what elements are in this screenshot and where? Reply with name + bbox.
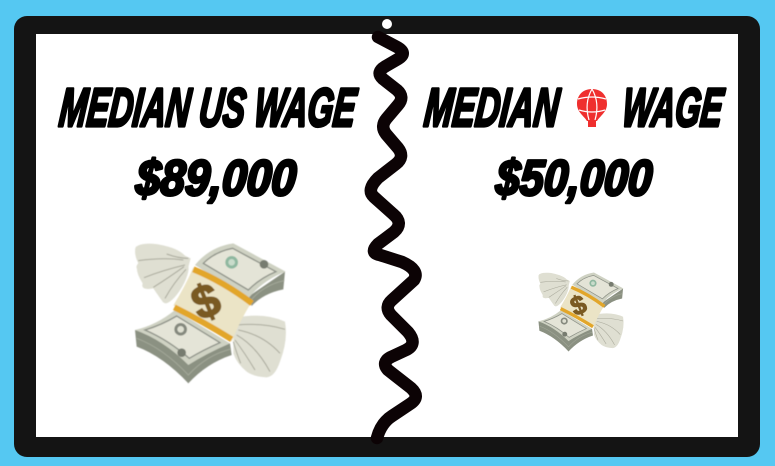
- value: $89,000: $89,000: [133, 150, 298, 206]
- icon: small money with wings: [538, 271, 624, 351]
- camera dot: [382, 19, 392, 29]
- value: $50,000: $50,000: [493, 150, 654, 206]
- heading: median balloon wage: [422, 78, 727, 138]
- white screen: [36, 34, 738, 437]
- icon: large money with wings: [133, 240, 286, 383]
- icon: red balloon: [577, 89, 607, 127]
- heading: median US wage: MEDIAN US WAGE: [57, 78, 360, 138]
- heading word: median: MEDIAN: [422, 78, 563, 138]
- wavy divider: [371, 37, 416, 438]
